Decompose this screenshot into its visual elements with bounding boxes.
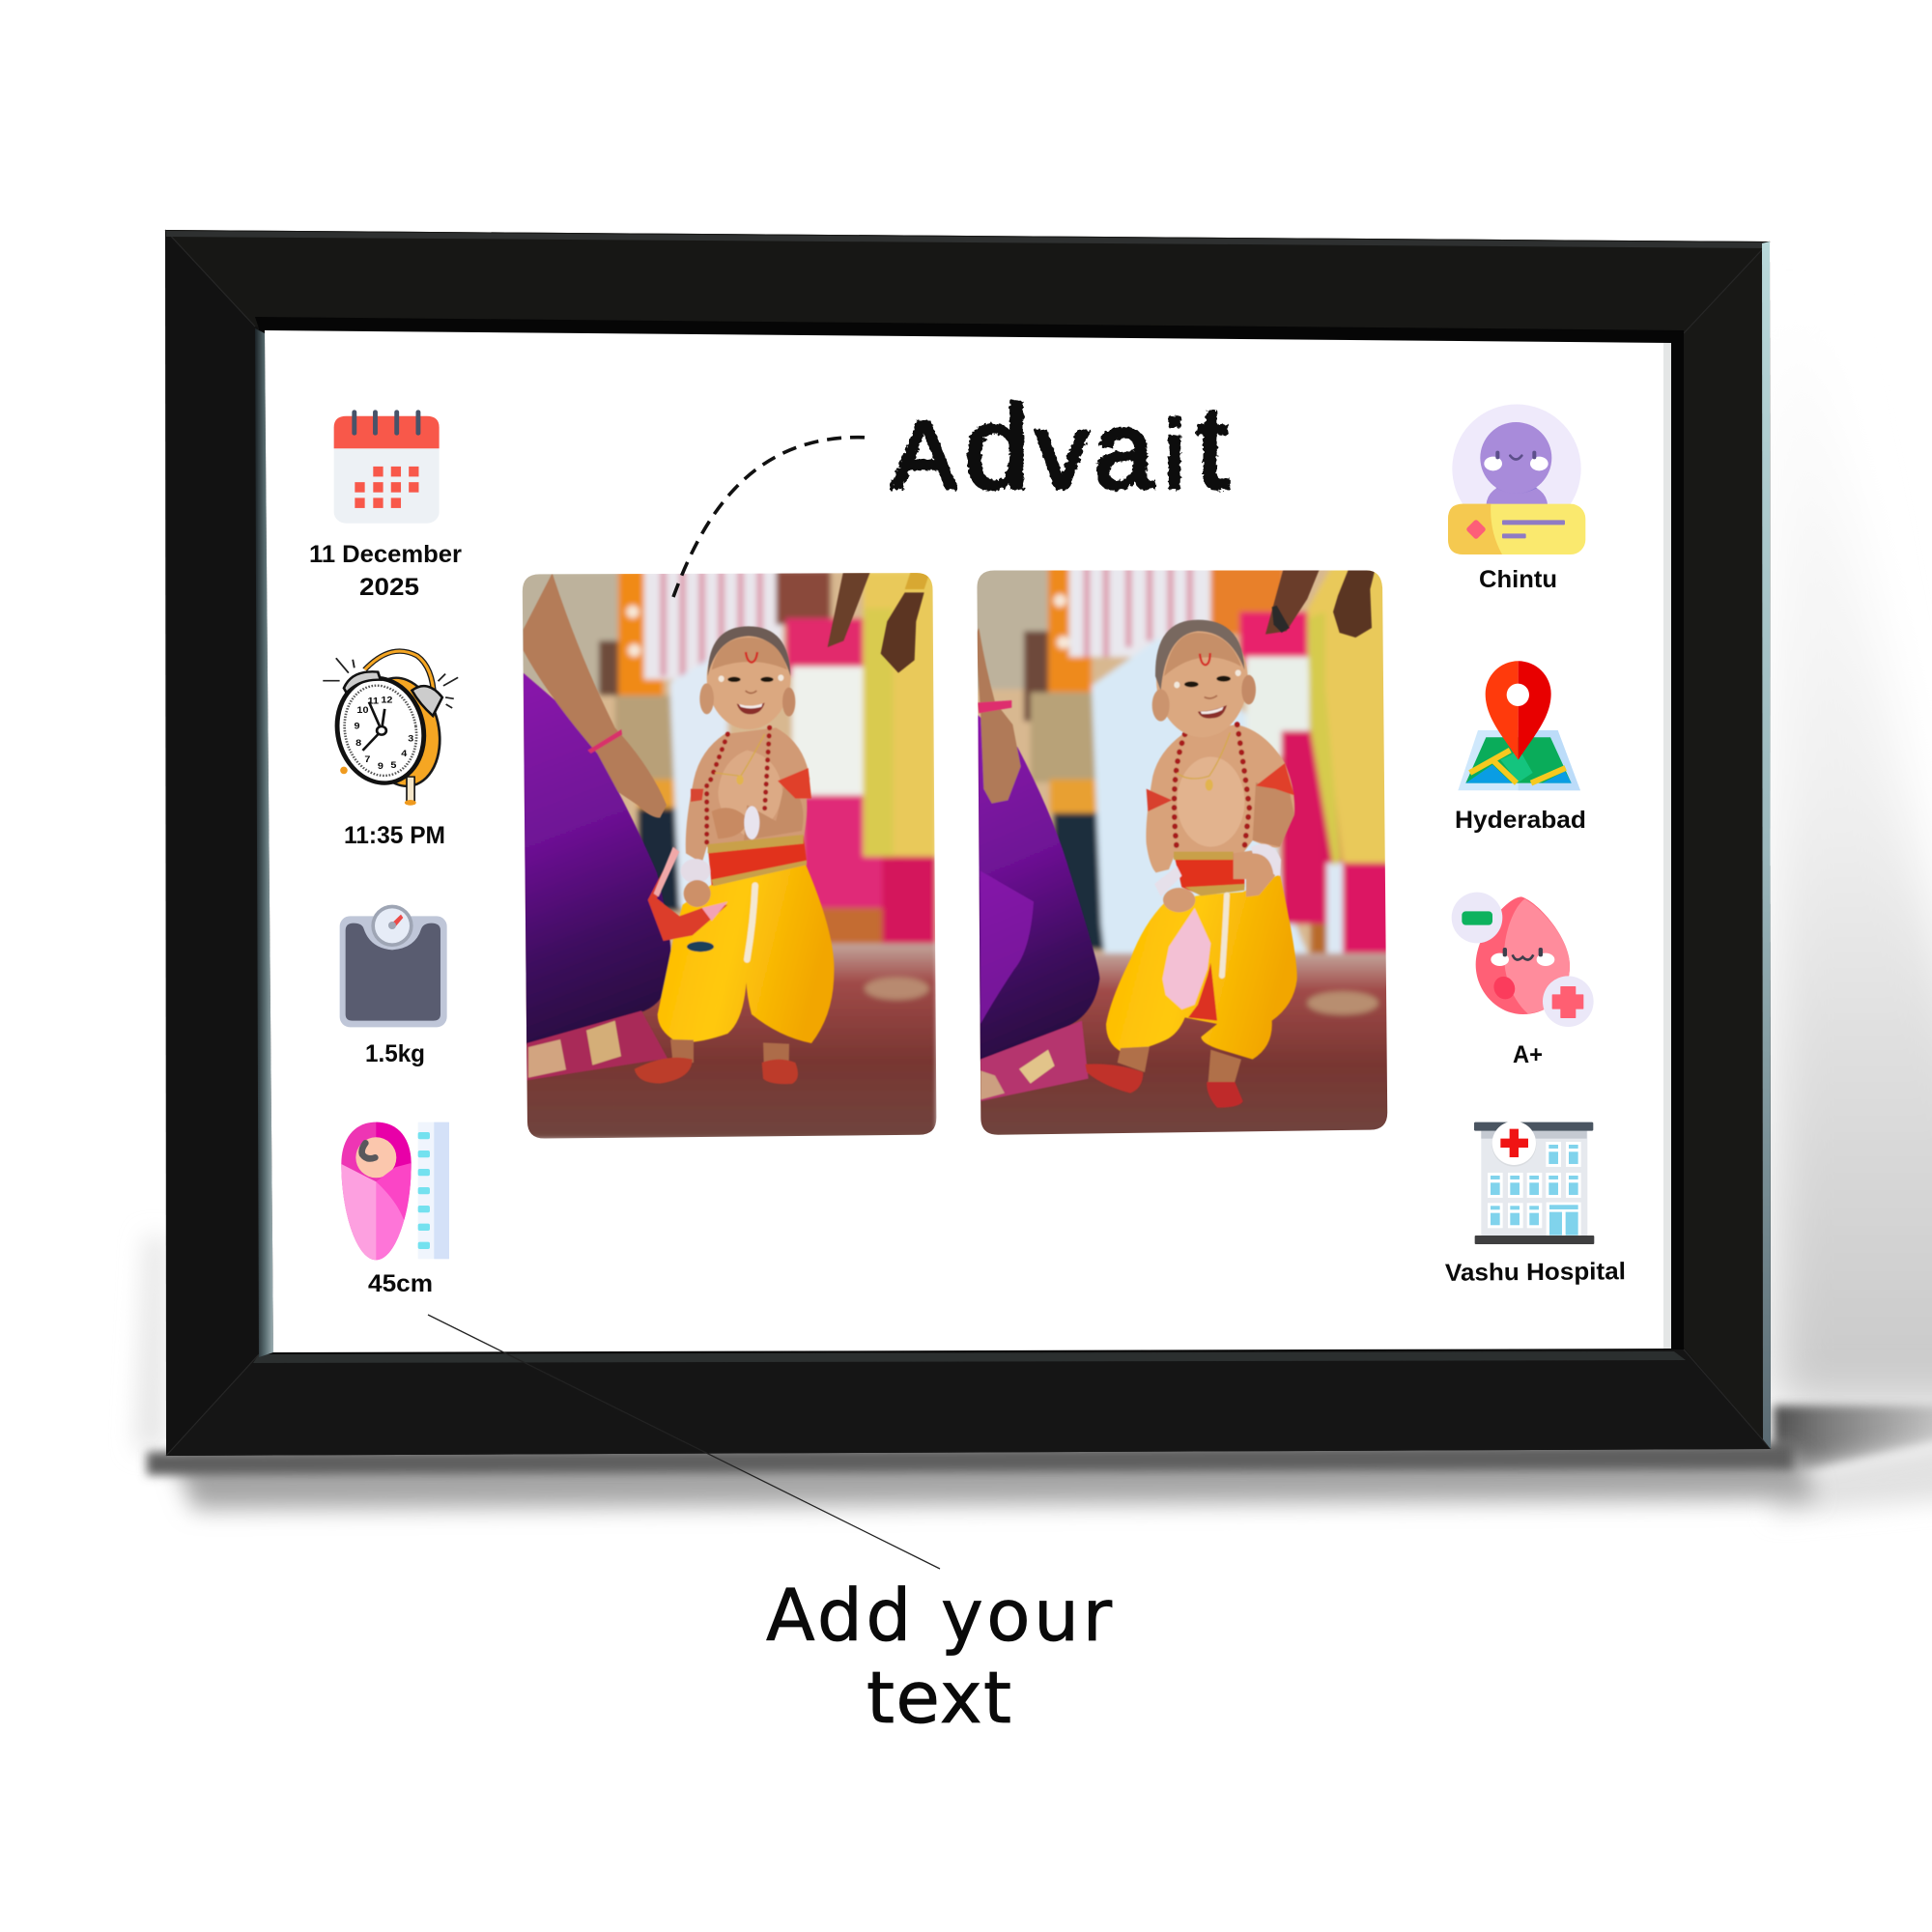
photo 2 pink cloth and tassel [1188, 963, 1217, 1021]
photo 1 bow and bangles [648, 845, 727, 941]
photo 2: child in yellow dhoti holding pink cloth [969, 563, 1394, 1140]
icon: alarm clock: 5 [390, 761, 397, 771]
label: date: 11 December [309, 541, 462, 568]
photo 1: child in yellow dhoti holding a bow [519, 570, 937, 1140]
icon: swaddled baby and ruler [341, 1122, 449, 1260]
photo 1 child head [707, 626, 790, 729]
photo 2 blurred background [969, 563, 1394, 1140]
label: weight: 1.5kg [365, 1040, 425, 1067]
title: child name: a [1094, 390, 1154, 511]
icon: alarm clock: 9 [378, 762, 384, 772]
title: child name: i [1164, 401, 1185, 509]
caption: add your text: Add your [766, 1575, 1113, 1658]
icon: alarm clock: 4 [401, 750, 408, 759]
caption: add your text: text [867, 1657, 1011, 1740]
photo 2 hands and bangles [1234, 848, 1275, 896]
icon: alarm clock: 3 [408, 734, 414, 744]
label: city: Hyderabad [1455, 807, 1586, 834]
icon: alarm clock: 11 [368, 696, 379, 706]
icon: map pin [1458, 661, 1580, 790]
label: name: Chintu [1479, 566, 1557, 593]
icon: calendar [334, 412, 440, 524]
label: time: 11:35 PM [344, 822, 445, 849]
label: hospital name: Vashu Hospital [1445, 1258, 1626, 1287]
frame mat: white picture area [265, 330, 1671, 1352]
label: date [309, 541, 462, 601]
photo 2 child head [1156, 621, 1248, 737]
photo 1 pants and belt [658, 863, 834, 1043]
icon: hospital building [1474, 1122, 1594, 1244]
title: child name: A [892, 401, 956, 509]
title: child name: d [964, 382, 1030, 513]
photo 1 child body [686, 727, 810, 863]
icon: alarm clock: 8 [355, 739, 361, 749]
photo 1 legs and feet [670, 1039, 694, 1065]
icon: alarm clock [323, 651, 458, 806]
caption: add your text [766, 1575, 1113, 1740]
title: child name: v [1036, 392, 1089, 511]
picture frame [165, 230, 1771, 1456]
photo 2 child body [1146, 724, 1294, 872]
leader line to caption [428, 1315, 940, 1569]
infographic canvas [131, 230, 1932, 1723]
photo 2 legs and feet [1118, 1046, 1150, 1072]
label: date: 2025 [359, 574, 419, 601]
icon: alarm clock: 7 [364, 754, 371, 765]
title: child name: t [1196, 382, 1229, 513]
photo 1 foreground figures [524, 570, 930, 1084]
photo 2 pants and belt [1106, 874, 1297, 1060]
photo 1 blurred background [519, 570, 937, 1140]
icon: blood drop [1452, 893, 1594, 1027]
icon: alarm clock: 10 [356, 706, 369, 716]
dashed arrow from name to photo [673, 438, 868, 597]
photo 2 foreground figures [976, 563, 1377, 1108]
label: blood group: A+ [1513, 1041, 1543, 1068]
icon: weighing scale [340, 905, 447, 1027]
icon: named child avatar [1448, 405, 1585, 554]
icon: alarm clock: 12 [381, 696, 393, 705]
label: length: 45cm [368, 1270, 433, 1297]
icon: alarm clock: 9 [354, 722, 360, 731]
